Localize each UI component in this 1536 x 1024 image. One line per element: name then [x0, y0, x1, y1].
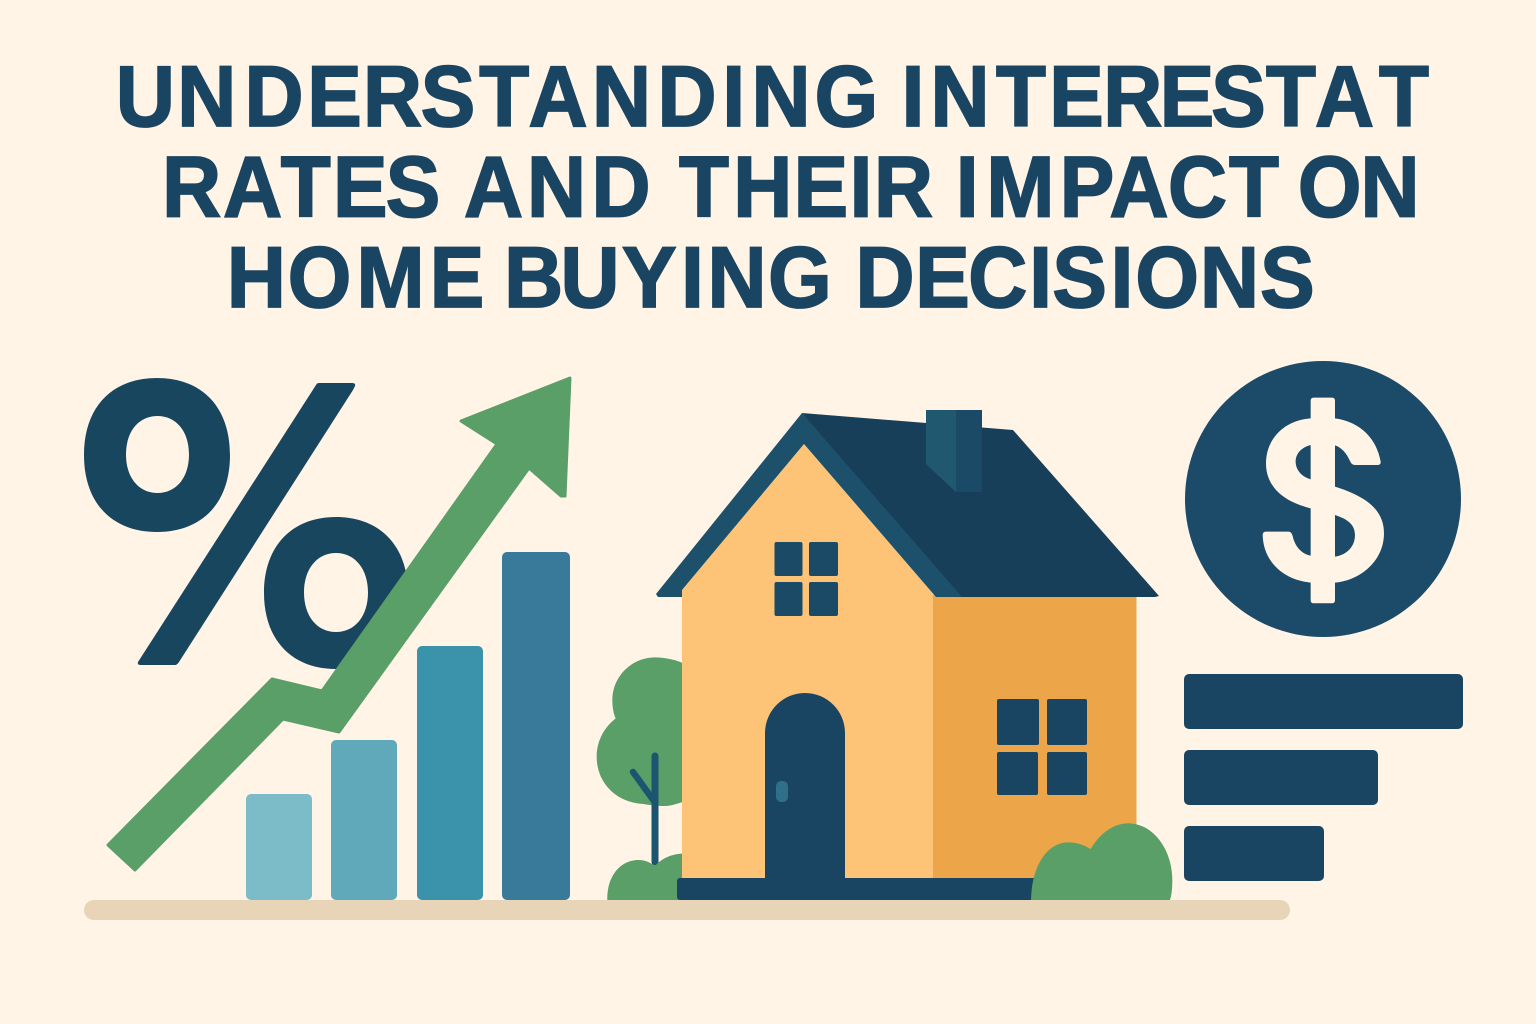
icon: percent sign: [84, 378, 408, 669]
house front wall: [682, 444, 936, 880]
bar chart: [246, 552, 570, 900]
house side wall: [933, 595, 1136, 880]
doorstep: [677, 878, 1047, 900]
title: RATES AND THEIR IMPACT ON: [162, 138, 1419, 235]
roof ridge band: [656, 413, 962, 597]
title: UNDERSTANDING INTERESTAT: [116, 48, 1429, 144]
small bush: [607, 853, 687, 900]
title: HOME BUYING DECISIONS: [227, 229, 1315, 325]
icon: dollar coin: [1185, 361, 1461, 637]
arrow: rising green trend: [108, 378, 570, 870]
roof plane: [802, 413, 1159, 597]
stacked bars: [1184, 674, 1463, 881]
door: [765, 693, 845, 880]
ground line: [84, 900, 1290, 920]
door handle: [776, 781, 788, 802]
icon: house: [656, 410, 1159, 900]
tree trunk: [633, 756, 655, 862]
icon: dollar symbol: [1263, 398, 1384, 603]
tree canopy: [597, 657, 687, 806]
icon: tree behind house: [597, 657, 687, 900]
chimney: [926, 410, 982, 492]
upper window: [774, 542, 838, 616]
icon: bush: [1031, 823, 1172, 900]
side window: [997, 699, 1087, 795]
title: [116, 48, 1429, 325]
